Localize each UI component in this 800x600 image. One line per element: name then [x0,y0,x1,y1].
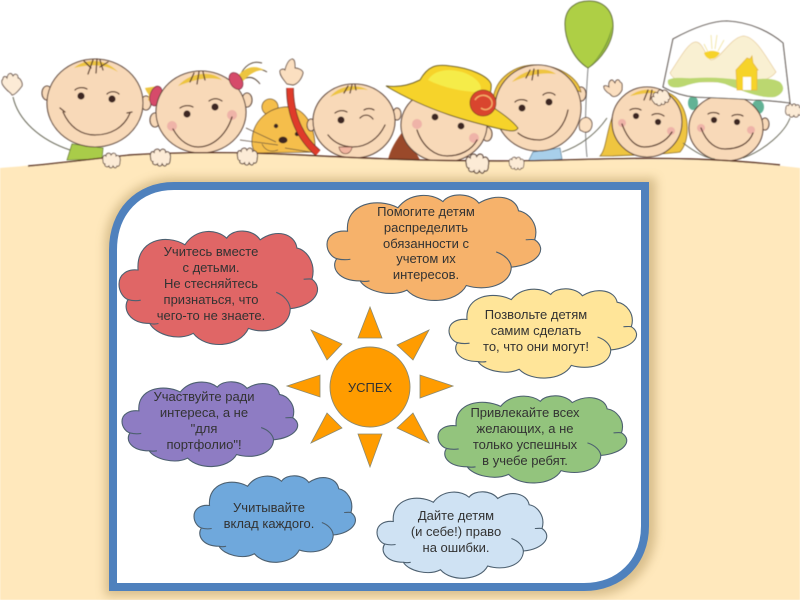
kid 4: girl in yellow hat [386,65,518,162]
cloud: orange [327,195,541,300]
cloud: blue [194,476,355,562]
cloud: orange: обязанности с [383,236,470,251]
cloud: purple: интереса, а не [160,405,248,420]
sun diagram [287,307,453,467]
cloud: red: Учитесь вместе [164,244,258,259]
sun label: УСПЕХ [348,380,392,395]
cloud: yellow: то, что они могут! [483,339,589,354]
sun rays [287,307,453,467]
kid 3: winking boy [307,84,401,158]
yellow hat [386,65,518,131]
panel: blue frame with white interior [113,186,645,587]
cloud: green: Привлекайте всех [470,405,580,420]
cloud: green: желающих, а не [476,421,574,436]
cloud: yellow: Позвольте детям [485,307,587,322]
cloud: green: только успешных [473,437,578,452]
cloud: green [438,396,627,483]
hands on the fence [103,87,800,173]
cloud: red: чего-то не знаете. [157,308,265,323]
cloud: light blue: (и себе!) право [411,524,501,539]
kid 5: boy with balloon [493,65,607,162]
kid 2: girl with pigtails [145,62,267,153]
cloud: light blue: Дайте детям [418,508,494,523]
cloud: light blue: на ошибки. [423,540,489,555]
fence top line [28,153,780,166]
cloud: purple: портфолио"! [166,437,242,452]
red sleeve and raised hand [280,59,318,153]
cloud: purple: Участвуйте ради [153,389,255,404]
balloon [565,1,613,157]
cloud: light blue [377,492,547,578]
cloud: orange: распределить [384,220,468,235]
child's drawing with house [663,21,790,103]
kid 1: boy waving [2,59,151,160]
cloud: yellow: самим сделать [491,323,582,338]
cloud: green: в учебе ребят. [482,453,568,468]
cloud: orange: учетом их [396,251,456,266]
cloud: yellow [449,289,637,378]
cloud: red: Не стесняйтесь [164,276,258,291]
bear toy [240,99,315,153]
kid 6: girl with yellow hair [600,80,687,157]
cloud: orange: интересов. [393,267,459,282]
kid 7: boy with the drawing [683,95,790,161]
cloud: orange: Помогите детям [377,204,475,219]
panel shadow [105,178,656,596]
cloud: red: с детьми. [182,260,240,275]
cloud: red [119,231,318,345]
ground: beige area below the fence [0,153,800,600]
cloud: purple [122,382,298,467]
cloud: purple: "для [191,421,217,436]
cloud: blue: вклад каждого. [224,516,314,531]
sun centre [330,347,410,427]
cloud: blue: Учитывайте [233,500,305,515]
cloud: red: признаться, что [164,292,258,307]
